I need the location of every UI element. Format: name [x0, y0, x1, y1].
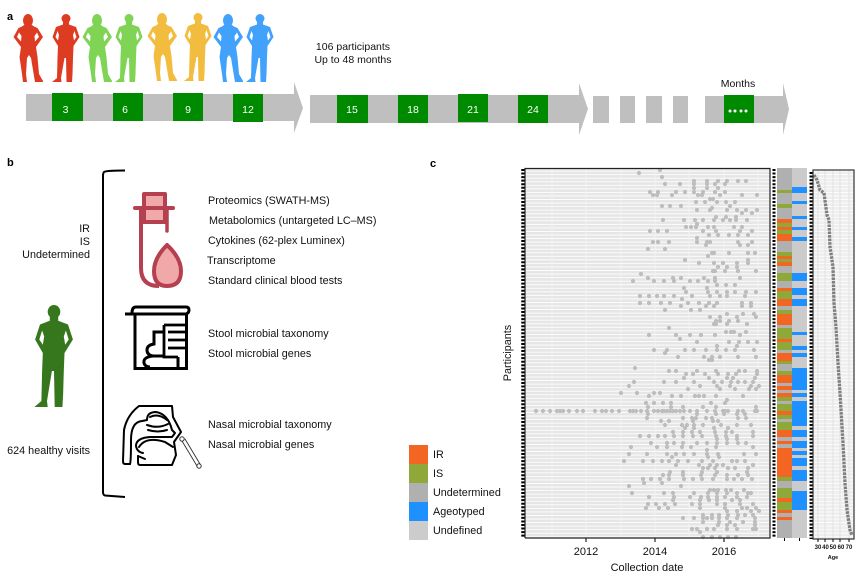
x axis tick labels: [574, 546, 736, 558]
scatter plot of collection dates: [523, 168, 770, 542]
timeline arrow months 3 to 12: 6: [122, 104, 128, 116]
age axis labels: 30: [815, 545, 822, 551]
age axis labels: 70: [846, 545, 853, 551]
x axis title: Collection date: [611, 562, 683, 574]
icon: blue man: [246, 14, 274, 82]
months label: Months: [721, 78, 755, 90]
icon: nasal cavity and swab: [123, 406, 201, 468]
timeline arrow months 3 to 12: 3: [63, 104, 69, 116]
legend: Undefined: [433, 525, 482, 537]
y axis title: Participants: [502, 324, 514, 381]
legend: Undetermined: [433, 487, 501, 499]
cohort summary text: Up to 48 months: [314, 54, 392, 66]
omics blood assays text: Proteomics (SWATH-MS): [208, 195, 330, 207]
nasal assays text: Nasal microbial taxonomy: [208, 419, 332, 431]
healthy visits text: 624 healthy visits: [7, 445, 91, 457]
icon: stool sample jar: [125, 307, 189, 368]
age axis labels: 60: [838, 545, 845, 551]
stool assays text: Stool microbial taxonomy: [208, 328, 329, 340]
age axis labels: 50: [830, 545, 837, 551]
omics blood assays text: [207, 195, 376, 287]
heatmap strip: insulin class and ageotype: [774, 168, 807, 541]
legend: Ageotyped: [433, 506, 485, 518]
age axis labels: [815, 545, 853, 561]
icon: dark green person: [34, 305, 73, 407]
nasal assays text: [208, 419, 332, 451]
bracket: [103, 170, 125, 497]
timeline arrow months 15 to 24: 18: [407, 104, 419, 116]
stool assays text: Stool microbial genes: [208, 348, 312, 360]
icon: green man: [115, 14, 142, 82]
timeline arrow months 15 to 24: 21: [467, 104, 479, 116]
age plot: [811, 170, 854, 542]
insulin classes text: Undetermined: [22, 249, 90, 261]
panel label c: c: [430, 158, 436, 170]
omics blood assays text: Metabolomics (untargeted LC–MS): [209, 215, 376, 227]
insulin classes text: IS: [80, 236, 90, 248]
insulin classes text: IR: [79, 223, 90, 235]
timeline arrow later months: [593, 83, 789, 135]
x axis tick labels: 2014: [643, 546, 667, 558]
icon: blue woman: [214, 14, 243, 82]
timeline arrow months 15 to 24: 15: [346, 104, 358, 116]
panel label a: a: [7, 11, 14, 23]
icon: yellow woman: [148, 13, 177, 81]
omics blood assays text: Cytokines (62-plex Luminex): [208, 235, 345, 247]
cohort summary text: 106 participants: [316, 41, 390, 53]
x axis tick labels: 2012: [574, 546, 598, 558]
panel label b: b: [7, 157, 14, 169]
age axis labels: 40: [822, 545, 829, 551]
icon: red woman: [14, 14, 43, 82]
timeline arrow months 15 to 24: 24: [527, 104, 539, 116]
icon: blood tube: [135, 194, 181, 286]
age axis labels: Age: [828, 555, 838, 561]
icon: red man: [52, 14, 80, 82]
omics blood assays text: Transcriptome: [207, 255, 276, 267]
timeline arrow months 3 to 12: [26, 82, 303, 133]
legend: IS: [433, 468, 443, 480]
legend: [409, 445, 501, 540]
timeline arrow months 3 to 12: 12: [242, 104, 254, 116]
icon: green woman: [82, 14, 112, 82]
stool assays text: [208, 328, 329, 360]
panel a: participant figures: [14, 13, 274, 82]
icon: yellow man: [184, 13, 212, 81]
timeline arrow months 3 to 12: 9: [185, 104, 191, 116]
omics blood assays text: Standard clinical blood tests: [208, 275, 343, 287]
nasal assays text: Nasal microbial genes: [208, 439, 315, 451]
x axis tick labels: 2016: [712, 546, 736, 558]
timeline arrow months 15 to 24: [310, 83, 588, 135]
legend: IR: [433, 449, 444, 461]
